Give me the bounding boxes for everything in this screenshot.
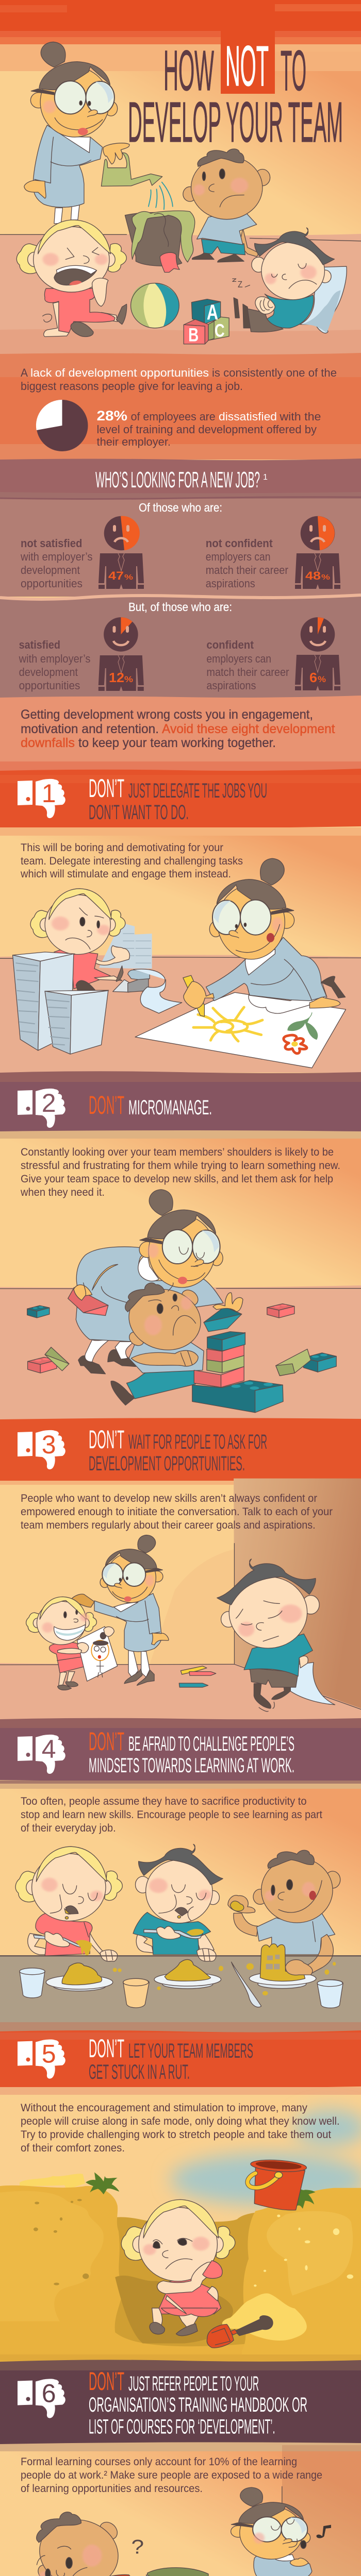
panel: tip 6 body xyxy=(0,2445,361,2576)
shoes xyxy=(150,2322,198,2336)
panel: tip 1 body: This will be boring and demotivating for your xyxy=(21,842,223,854)
leaning woman xyxy=(76,1190,223,1374)
panel: tip 5 body: people will cruise along in safe mode, only doing what they know well. xyxy=(21,2115,339,2127)
illustration: paperwork and crayon drawing xyxy=(0,858,361,1068)
happy blonde girl with drawing xyxy=(26,1597,118,1690)
icon: thumbs down 1 xyxy=(18,779,65,818)
panel: tip 6 body: Formal learning courses only account for 10% of the learning xyxy=(21,2456,297,2468)
typewriter xyxy=(113,969,182,1013)
red bucket xyxy=(248,2158,307,2210)
panel: tip 6 header xyxy=(0,2360,361,2451)
boy with handbook: ? xyxy=(131,2536,144,2558)
icon: thumbs down 2: 2 xyxy=(42,1089,56,1117)
title block: TO xyxy=(281,39,306,103)
crossed arm boy xyxy=(105,1270,220,1405)
panel: tip 4 body: of their everyday job. xyxy=(21,1822,116,1834)
title block: HOW xyxy=(163,39,214,103)
hands holding bricks xyxy=(68,1283,243,1332)
panel: tip 2 header: DON’T xyxy=(89,1091,124,1120)
statistic: 28 percent dissatisfied: of employees are xyxy=(131,410,216,423)
panel: tip 3 body xyxy=(0,1479,361,1721)
icon: thumbs down 2 xyxy=(18,1089,65,1128)
icon: thumbs down 4 xyxy=(18,1735,65,1774)
stat: not satisfied 47 percent: not satisfied xyxy=(21,537,82,550)
panel: tip 5 body: of their comfort zones. xyxy=(21,2142,125,2154)
intro sentence: lack of development opportunities xyxy=(30,366,209,379)
stat: not confident 48 percent: employers can xyxy=(206,550,270,563)
panel: tip 6 body: of learning opportunities and resources. xyxy=(21,2483,203,2495)
stat: not confident 48 percent: not confident xyxy=(206,537,273,550)
stat: not confident 48 percent: 48 xyxy=(305,569,321,582)
heading: 1 xyxy=(263,473,268,482)
panel: tip 2 body: Give your team space to develop new skills, and let them ask for help xyxy=(21,1173,333,1185)
panel: tip 1 body xyxy=(0,836,361,1073)
girl sitting in pit xyxy=(121,2199,235,2332)
icon: thumbs down 1: 1 xyxy=(42,779,56,808)
statistic: 28 percent dissatisfied: with the xyxy=(279,410,321,423)
ABC blocks xyxy=(184,299,229,345)
panel: tip 4 body: stop and learn new skills. Encourage people to see learning as part xyxy=(21,1809,322,1821)
stacks of books xyxy=(142,2568,266,2576)
stat: not confident 48 percent: aspirations xyxy=(206,577,255,590)
stat: confident 6 percent: match their career xyxy=(206,666,289,679)
dying plant xyxy=(125,211,195,273)
sand front band xyxy=(0,2354,361,2363)
subheading: of those who are: Of those who are: xyxy=(139,501,222,514)
crayons on floor xyxy=(179,1666,216,1687)
panel: tip 5 header xyxy=(0,2022,361,2089)
stat: not satisfied 47 percent: with employer’s xyxy=(20,550,92,563)
stat: satisfied 12 percent: satisfied xyxy=(19,638,60,651)
stat: not confident 48 percent: match their career xyxy=(206,564,288,577)
panel: tip 4 header xyxy=(0,1718,361,1789)
panel: tip 3 body: team members regularly about their career goals and aspirations. xyxy=(21,1519,316,1531)
stat: satisfied 12 percent xyxy=(19,617,144,692)
sand banks xyxy=(0,2174,361,2362)
panel: tip 5 body: Try to provide challenging work to stretch people and take them out xyxy=(21,2129,331,2141)
panel: tip 1 body: team. Delegate interesting and challenging tasks xyxy=(21,855,243,867)
panel: tip 2 header: MICROMANAGE. xyxy=(128,1096,212,1119)
woman humming xyxy=(231,2487,331,2576)
sad dark-haired boy xyxy=(217,1559,335,1711)
girl eating xyxy=(15,1846,122,1961)
icon: thumbs down 6: 6 xyxy=(42,2379,56,2408)
stat: not satisfied 47 percent: 47 xyxy=(108,569,124,582)
panel: tip 2 body: stressful and frustrating for them while trying to learn something new. xyxy=(21,1160,340,1172)
panel: tip 2 body xyxy=(0,1139,361,1420)
panel: tip 6 body: people do at work.² Make sure people are exposed to a wide range xyxy=(21,2469,322,2481)
subheading: but of those who are: But, of those who are: xyxy=(128,600,232,614)
intro sentence: biggest reasons people give for leaving a job. xyxy=(21,380,243,393)
stat: confident 6 percent: confident xyxy=(206,638,254,651)
panel: tip 3 body: empowered enough to initiate the conversation. Talk to each of your xyxy=(21,1506,333,1518)
illustration: micromanaging with bricks xyxy=(0,1190,361,1413)
icon: thumbs down 5 xyxy=(18,2039,65,2079)
yawning girl xyxy=(17,220,127,337)
illustration: hero characters xyxy=(0,42,361,345)
stat: satisfied 12 percent: with employer’s xyxy=(19,652,90,665)
stat: satisfied 12 percent: development xyxy=(19,666,78,679)
stat: confident 6 percent xyxy=(206,617,340,692)
panel: hero xyxy=(0,0,361,371)
stat: not satisfied 47 percent xyxy=(20,516,144,590)
panel: tip 5 header: GET STUCK IN A RUT. xyxy=(89,2061,190,2083)
stat: satisfied 12 percent: opportunities xyxy=(19,679,80,692)
panel: eight downfalls intro: Avoid these eight development xyxy=(162,722,335,736)
illustration: conversation with one team member xyxy=(0,1479,361,1720)
panel: tip 6 header: DON’T xyxy=(89,2367,124,2396)
intro sentence: is consistently one of the xyxy=(212,366,337,379)
grass tufts xyxy=(86,2172,316,2209)
stat: confident 6 percent: % xyxy=(318,674,326,684)
icon: thumbs down 6 xyxy=(18,2379,65,2418)
panel: tip 4 header: DON’T xyxy=(89,1727,124,1756)
panel: tip 4 body: Too often, people assume they have to sacrifice productivity to xyxy=(21,1795,307,1807)
stat: not confident 48 percent: % xyxy=(321,573,330,582)
panel: eight downfalls intro: Getting development wrong costs you in engagement, xyxy=(21,707,313,722)
illustration: stuck in a rut sandpit xyxy=(0,2158,361,2362)
panel: tip 5 body xyxy=(0,2087,361,2363)
ABC blocks: C xyxy=(215,321,225,341)
title block: NOT xyxy=(225,35,269,98)
happy brown boy xyxy=(228,1850,340,1975)
panel: introduction xyxy=(0,353,361,460)
statistic: 28 percent dissatisfied: level of training and development offered by xyxy=(97,423,317,436)
panel: eight downfalls intro: downfalls xyxy=(21,736,75,750)
heading xyxy=(95,467,268,493)
panel: tip 1 body: which will stimulate and engage them instead. xyxy=(20,868,231,880)
stat: satisfied 12 percent: 12 xyxy=(109,670,124,685)
intro sentence: A xyxy=(21,366,28,379)
statistic: 28 percent dissatisfied xyxy=(97,408,321,448)
stat: not satisfied 47 percent: % xyxy=(124,573,133,582)
ABC blocks: A xyxy=(207,301,218,325)
panel: tip 1 header: DON’T WANT TO DO. xyxy=(89,801,189,824)
boy eating xyxy=(133,1844,223,1961)
panel: tip 3 header xyxy=(0,1418,361,1482)
statistic: 28 percent dissatisfied: 28% xyxy=(97,408,127,423)
stat: confident 6 percent: 6 xyxy=(309,670,317,685)
table items xyxy=(0,1944,361,2008)
title block xyxy=(128,0,343,154)
panel: tip 4 body xyxy=(0,1789,361,2023)
blonde girl xyxy=(30,889,129,992)
ABC blocks: B xyxy=(188,324,199,345)
woman with watering can xyxy=(24,42,173,224)
woman praising xyxy=(71,1535,169,1685)
panel: eight downfalls intro: motivation and retention. xyxy=(21,722,159,736)
icon: thumbs down 4: 4 xyxy=(42,1735,56,1764)
stat: not satisfied 47 percent: opportunities xyxy=(21,577,83,590)
stat: satisfied 12 percent: % xyxy=(124,674,133,684)
stat: confident 6 percent: employers can xyxy=(206,652,271,665)
sleeping boy xyxy=(233,228,347,333)
brick tower xyxy=(192,1332,283,1413)
panel: tip 2 body: when they need it. xyxy=(20,1187,105,1198)
drawing paper xyxy=(135,992,346,1068)
sad boy xyxy=(183,149,270,262)
pie chart: 28 percent xyxy=(36,400,88,451)
loose bricks xyxy=(27,1304,336,1376)
illustration: children eating at table xyxy=(0,1844,361,2008)
panel: tip 5 header: DON’T xyxy=(89,2034,124,2063)
panel: tip 3 header: DON’T xyxy=(89,1425,124,1454)
icon: thumbs down 3 xyxy=(18,1430,65,1469)
stat: not satisfied 47 percent: development xyxy=(21,564,80,577)
shovel xyxy=(207,2316,273,2348)
stat: not confident 48 percent xyxy=(206,516,340,590)
panel: who's looking for a new job xyxy=(0,459,361,698)
panel: eight downfalls intro xyxy=(0,696,361,772)
panel: tip 3 body: People who want to develop new skills aren’t always confident or xyxy=(21,1493,317,1504)
beach ball xyxy=(131,283,179,328)
paper stacks xyxy=(13,952,109,1054)
statistic: 28 percent dissatisfied: dissatisfied xyxy=(219,410,277,423)
panel: tip 1 header: DON’T xyxy=(89,774,124,803)
panel: tip 2 body: Constantly looking over your team members’ shoulders is likely to be xyxy=(21,1146,334,1158)
panel: tip 5 body: Without the encouragement and stimulation to improve, many xyxy=(21,2102,307,2114)
panel: eight downfalls intro: to keep your team working together. xyxy=(78,736,276,750)
statistic: 28 percent dissatisfied: their employer. xyxy=(97,435,171,448)
woman drawing xyxy=(183,858,346,1016)
icon: thumbs down 5: 5 xyxy=(42,2040,56,2069)
icon: thumbs down 3: 3 xyxy=(42,1430,56,1459)
stat: confident 6 percent: aspirations xyxy=(206,679,256,692)
panel: tip 2 header xyxy=(0,1071,361,1140)
illustration: handbook and books xyxy=(0,2486,361,2576)
panel: tip 1 header xyxy=(0,769,361,836)
boy with handbook xyxy=(14,2500,161,2576)
handbook xyxy=(28,2574,161,2576)
intro sentence xyxy=(21,366,337,393)
